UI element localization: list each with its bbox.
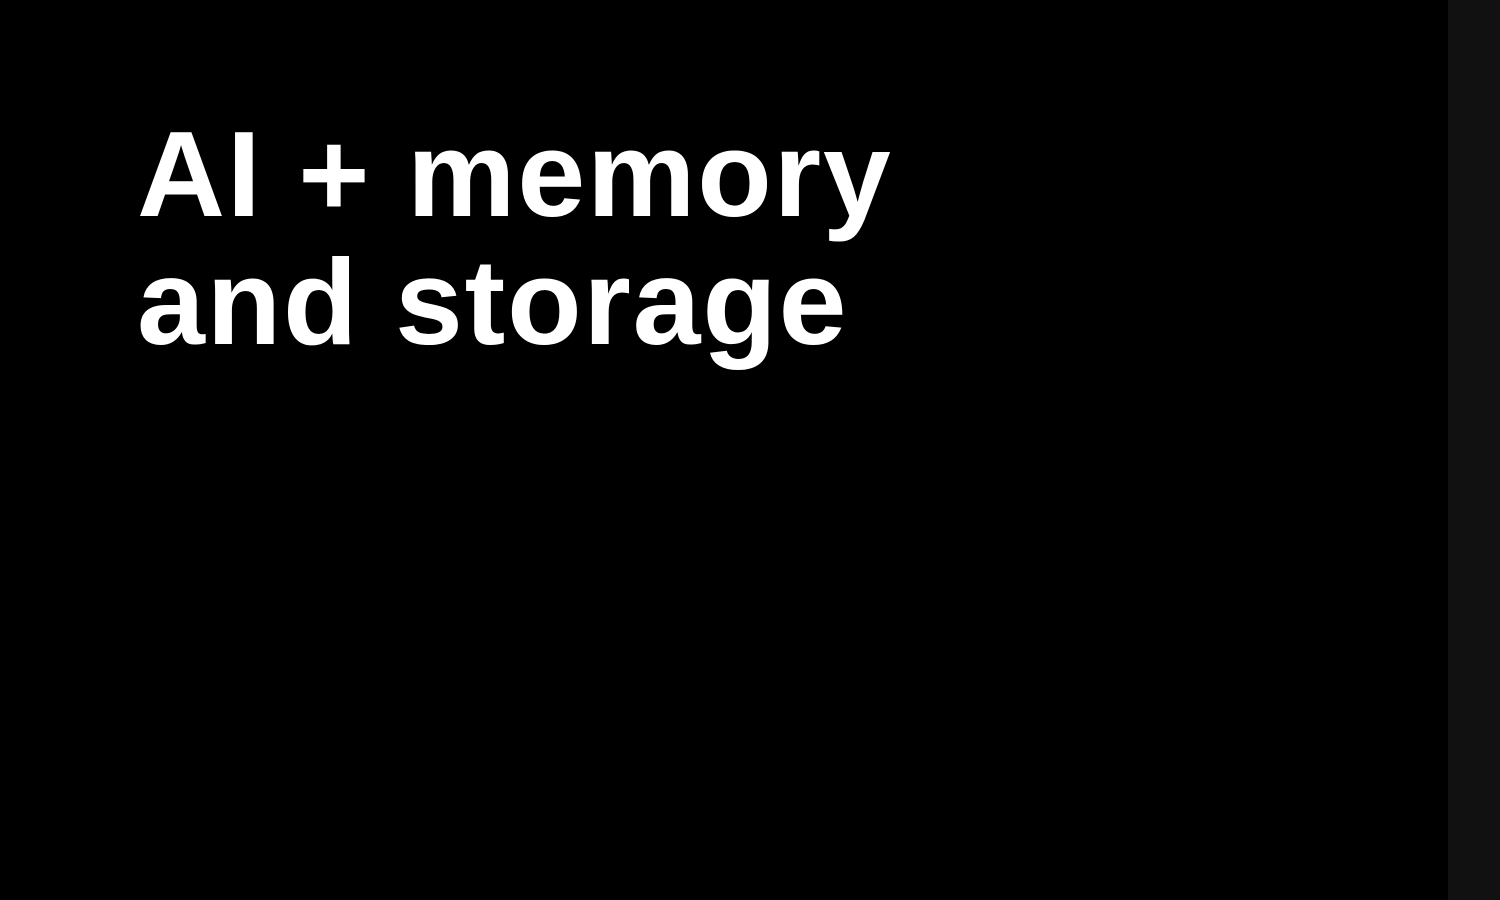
title: and storage (137, 234, 848, 370)
title: AI + memory (137, 106, 892, 242)
title (137, 106, 892, 370)
